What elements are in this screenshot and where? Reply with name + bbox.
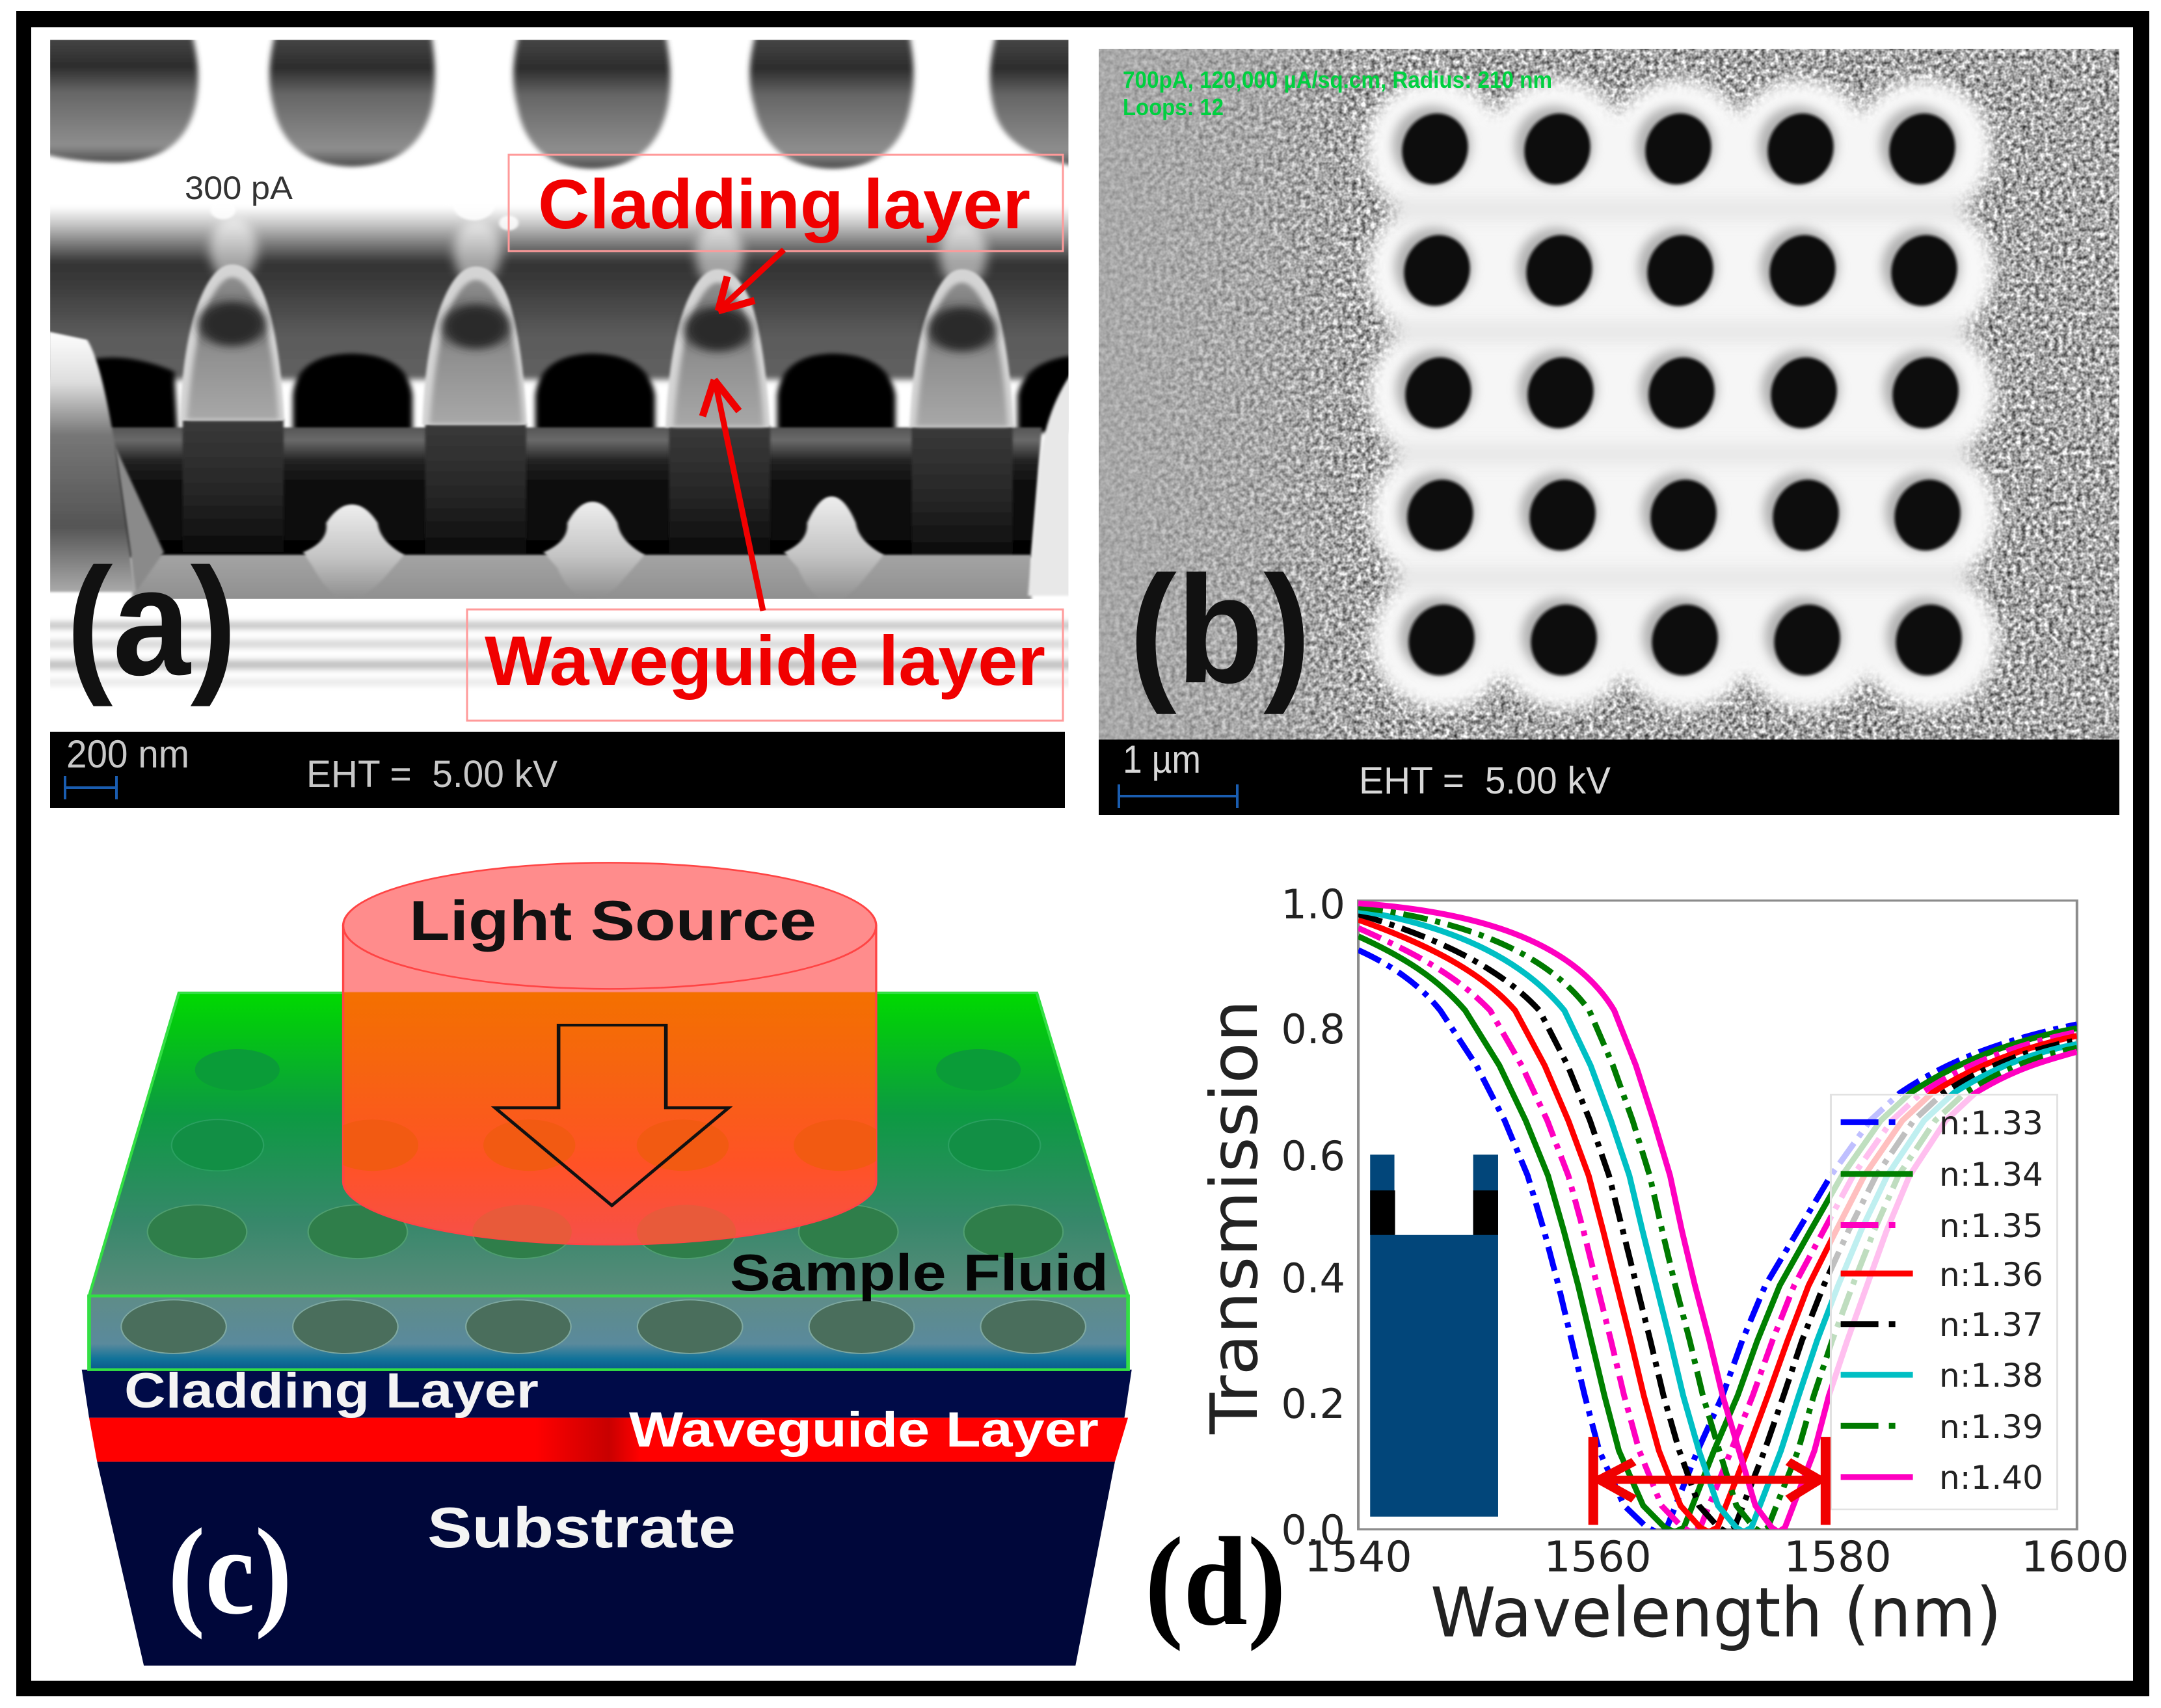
label: (b): (b): [1129, 544, 1311, 715]
green beam parameters text: [1123, 66, 1552, 120]
info bar a: EHT = 5.00 kV: [306, 753, 557, 795]
arrow: light direction: [495, 1025, 729, 1205]
legend labels: n:1.33: [1939, 1104, 2043, 1142]
x axis tick labels: [1304, 1533, 2129, 1582]
legend labels: n:1.39: [1939, 1408, 2043, 1446]
sample fluid front face: [89, 1296, 1128, 1370]
callout box: cladding layer: Cladding layer: [538, 165, 1030, 243]
green beam parameters text: 700pA, 120,000 µA/sq.cm, Radius: 210 nm: [1123, 66, 1552, 93]
label: Cladding Layer: Cladding Layer: [124, 1363, 539, 1419]
label: (d): (d): [1145, 1512, 1286, 1652]
callout box: waveguide layer: Waveguide layer: [485, 621, 1045, 700]
legend labels: n:1.38: [1939, 1357, 2043, 1394]
panel: (b) SEM top view: [1099, 49, 2119, 815]
x axis tick labels: 1600: [2021, 1533, 2129, 1582]
y axis tick labels: [1281, 881, 1345, 1554]
legend labels: n:1.36: [1939, 1256, 2043, 1294]
legend box and keys: [1831, 1095, 2058, 1510]
y axis tick labels: 0.8: [1281, 1006, 1345, 1053]
plot axes box: [1358, 901, 2077, 1529]
substrate: [97, 1461, 1115, 1666]
x axis tick labels: 1540: [1304, 1533, 1412, 1582]
info bar b: 1 µm: [1123, 738, 1201, 781]
green beam parameters text: Loops: 12: [1123, 94, 1224, 120]
etched holes in the layer: [121, 1049, 1086, 1354]
arrow: waveguide layer pointer: [703, 380, 763, 611]
label: (c): (c): [168, 1504, 292, 1640]
panel: (a) SEM cross-section: [21, 21, 1101, 808]
legend labels: n:1.37: [1939, 1306, 2043, 1344]
inset waveguide cross-section: [1370, 1154, 1498, 1517]
label: 300 pA: 300 pA: [185, 170, 293, 206]
red range arrow: [1593, 1437, 1825, 1525]
light source cylinder: [327, 862, 885, 1259]
info bar b: EHT = 5.00 kV: [1359, 760, 1611, 802]
cladding layer band: [82, 1370, 1132, 1418]
bright halo area: [1365, 79, 1999, 710]
sample fluid top face: [89, 993, 1128, 1296]
panel: (c) device schematic: [82, 862, 1132, 1666]
transmission curves: [1358, 903, 2077, 1532]
y axis title: Transmission: [1196, 1000, 1272, 1435]
layered device drawing: [82, 862, 1132, 1666]
panel: (d) transmission chart: [1145, 881, 2129, 1653]
x axis title: Wavelength (nm): [1430, 1573, 2002, 1653]
label: (a): (a): [66, 536, 237, 707]
SEM image a: [50, 40, 1068, 687]
arrow: cladding layer pointer: [718, 250, 784, 311]
legend labels: [1939, 1104, 2043, 1497]
y axis tick labels: 1.0: [1281, 881, 1345, 928]
legend labels: n:1.40: [1939, 1459, 2043, 1497]
label: Light Source: Light Source: [409, 890, 816, 952]
y axis tick labels: 0.2: [1281, 1380, 1345, 1428]
y axis tick labels: 0.0: [1281, 1506, 1345, 1554]
label: Substrate: Substrate: [427, 1495, 736, 1560]
5x5 hole array: [1392, 104, 1972, 685]
y axis tick labels: 0.6: [1281, 1132, 1345, 1180]
callout box: waveguide layer: [467, 609, 1063, 721]
label: Waveguide Layer: Waveguide Layer: [629, 1402, 1099, 1458]
x axis tick labels: 1580: [1784, 1533, 1892, 1582]
legend labels: n:1.35: [1939, 1207, 2043, 1245]
label: Sample Fluid: Sample Fluid: [730, 1244, 1108, 1301]
SEM image b: [1099, 49, 2119, 740]
faint shading between rows: [1386, 209, 1978, 578]
info bar a: [50, 732, 1065, 808]
info bar b: [1099, 738, 2119, 815]
y axis tick labels: 0.4: [1281, 1255, 1345, 1302]
x axis tick labels: 1560: [1544, 1533, 1652, 1582]
waveguide layer band: [89, 1418, 1128, 1461]
legend labels: n:1.34: [1939, 1156, 2043, 1194]
info bar a: 200 nm: [66, 732, 189, 776]
plot drawing: [1358, 901, 2077, 1532]
